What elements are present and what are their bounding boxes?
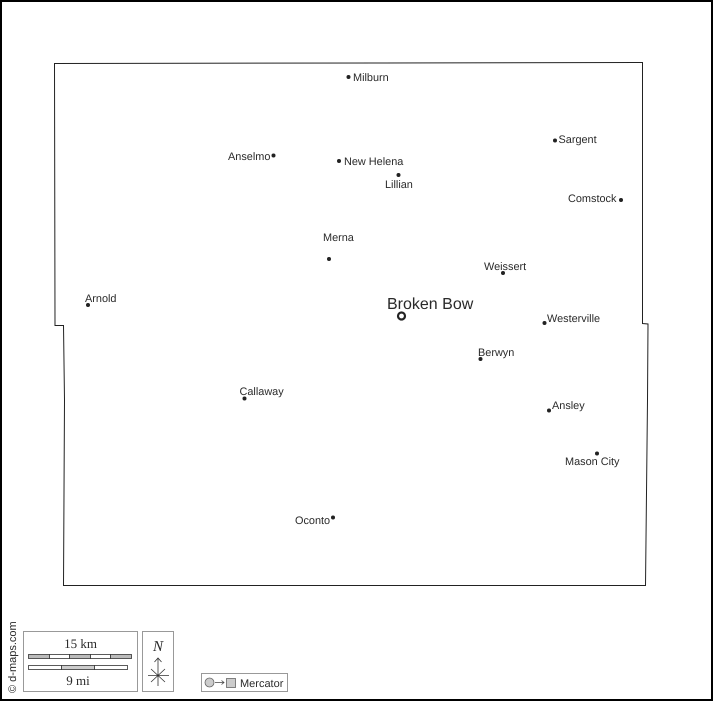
projection box — [202, 674, 288, 692]
city: Berwyn: Berwyn — [478, 347, 514, 359]
scale label: mi: 9 mi — [66, 673, 90, 688]
mi scale bar — [28, 666, 128, 670]
scale box — [24, 632, 138, 692]
city: New Helena: New Helena — [344, 156, 404, 168]
city: Weissert: Weissert — [484, 261, 526, 273]
city: Merna: Merna — [323, 232, 355, 244]
city: Merna — [323, 232, 355, 261]
city: Callaway: Callaway — [240, 386, 284, 398]
city: Oconto: Oconto — [295, 515, 330, 527]
compass arrow — [148, 658, 169, 686]
city: Milburn: Milburn — [353, 72, 389, 84]
city: Sargent: Sargent — [558, 134, 597, 146]
north arrow box — [142, 632, 174, 692]
city: Comstock: Comstock — [568, 193, 617, 205]
km scale bar — [28, 654, 132, 658]
city: Broken Bow: Broken Bow — [387, 296, 474, 313]
city: Westerville: Westerville — [547, 313, 600, 325]
city: Anselmo: Anselmo — [228, 151, 270, 163]
north label: N — [152, 639, 164, 655]
copyright: © d-maps.com — [7, 621, 19, 693]
city: Ansley: Ansley — [552, 400, 585, 412]
city: Mason City: Mason City — [565, 456, 620, 468]
county boundary — [54, 62, 648, 586]
city: Lillian — [385, 173, 413, 191]
city: Arnold: Arnold — [85, 293, 116, 305]
scale label: km: 15 km — [64, 636, 97, 651]
city: Lillian: Lillian — [385, 179, 413, 191]
projection icon — [205, 678, 214, 687]
projection label: Mercator — [240, 678, 284, 690]
